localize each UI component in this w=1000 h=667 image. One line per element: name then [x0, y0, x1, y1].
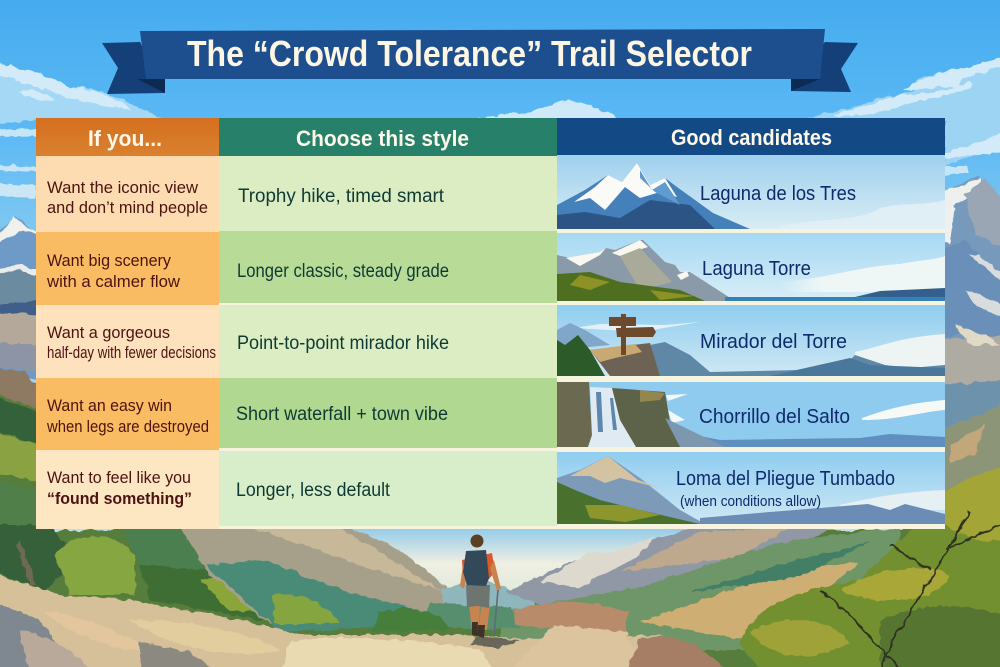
row 3 condition: Want a gorgeous [47, 323, 170, 342]
row 2 [36, 231, 945, 305]
row 3 candidate: Mirador del Torre: Mirador del Torre [700, 331, 847, 353]
background: valley mountains [180, 525, 900, 650]
trekking pole [494, 590, 498, 636]
banner right tail [791, 42, 858, 92]
row 5 condition: “found something” [47, 489, 192, 508]
row 4 condition: when legs are destroyed [46, 417, 209, 436]
banner left fold [137, 79, 165, 93]
row 2 candidate: Laguna Torre [557, 233, 945, 301]
row 5 condition: Want to feel like you [47, 468, 191, 487]
column header: Good candidates [557, 118, 945, 155]
row 5 condition [36, 450, 219, 529]
row 5 candidate: Loma del Pliegue Tumbado: Loma del Pliegue Tumbado [676, 468, 895, 490]
banner left tail [102, 42, 165, 94]
row 2 candidate: Laguna Torre: Laguna Torre [702, 258, 811, 280]
background: valley sky [340, 525, 720, 595]
table backing [36, 118, 945, 529]
row 3 style [219, 305, 557, 378]
row 1 style: Trophy hike, timed smart [238, 186, 445, 207]
row 4 style: Short waterfall + town vibe [236, 404, 448, 425]
row 2 condition [36, 232, 219, 305]
row 4 condition: Want an easy win [47, 396, 172, 415]
row 1 [36, 155, 945, 232]
row 1 candidate: Laguna de los Tres: Laguna de los Tres [700, 183, 856, 205]
hiker arms [460, 560, 501, 591]
hiker backpack [463, 550, 489, 586]
row 4 style [219, 378, 557, 448]
hiker [460, 534, 501, 638]
background: clouds [0, 55, 1000, 198]
hiker legs [469, 605, 490, 630]
row 2 condition: with a calmer flow [46, 272, 181, 291]
row 5 candidate: Loma del Pliegue Tumbado [557, 452, 945, 524]
row 3 [36, 305, 945, 378]
hiker shorts [466, 585, 490, 608]
row 1 candidate: Laguna de los Tres [557, 155, 945, 229]
row 5 [36, 450, 945, 529]
row 3 candidate: Mirador del Torre [557, 305, 945, 376]
row 1 condition [36, 156, 219, 232]
column header: Choose this style [219, 118, 557, 156]
column header: Choose this style: Choose this style [296, 126, 469, 151]
row 1 condition: Want the iconic view [47, 178, 199, 197]
row 1 condition: and don’t mind people [47, 198, 208, 217]
row 3 style: Point-to-point mirador hike [237, 333, 449, 354]
background: left mountains [0, 216, 40, 380]
hiker head [470, 534, 484, 548]
background: right mountain [940, 176, 1000, 510]
title: The “Crowd Tolerance” Trail Selector [187, 33, 752, 74]
row 2 condition: Want big scenery [47, 251, 171, 270]
column header: If you [36, 118, 219, 156]
title banner [102, 29, 858, 94]
banner right fold [791, 79, 820, 91]
row 5 style [219, 451, 557, 526]
row 4 candidate: Chorrillo del Salto [557, 382, 945, 447]
column header: Good candidates: Good candidates [671, 125, 832, 150]
row 4 [36, 378, 945, 450]
row 2 style [219, 231, 557, 303]
row 4 candidate: Chorrillo del Salto: Chorrillo del Salto [699, 406, 850, 428]
hiker shirt [462, 553, 495, 582]
background: bottom base vegetation [0, 367, 1000, 667]
background: right tree [740, 462, 1000, 667]
row 4 condition [36, 378, 219, 450]
row 3 condition: half-day with fewer decisions [47, 343, 216, 362]
row 1 style [219, 156, 557, 231]
column header: If you: If you... [88, 126, 162, 151]
row 5 style: Longer, less default [236, 480, 391, 501]
signpost [609, 314, 656, 355]
row 5 candidate: Loma del Pliegue Tumbado: (when conditions allow) [680, 493, 821, 510]
row 2 style: Longer classic, steady grade [237, 261, 449, 282]
row 3 condition [36, 305, 219, 378]
banner body [140, 29, 825, 79]
background: rocky foreground [0, 572, 745, 667]
hiker boots [472, 622, 485, 638]
